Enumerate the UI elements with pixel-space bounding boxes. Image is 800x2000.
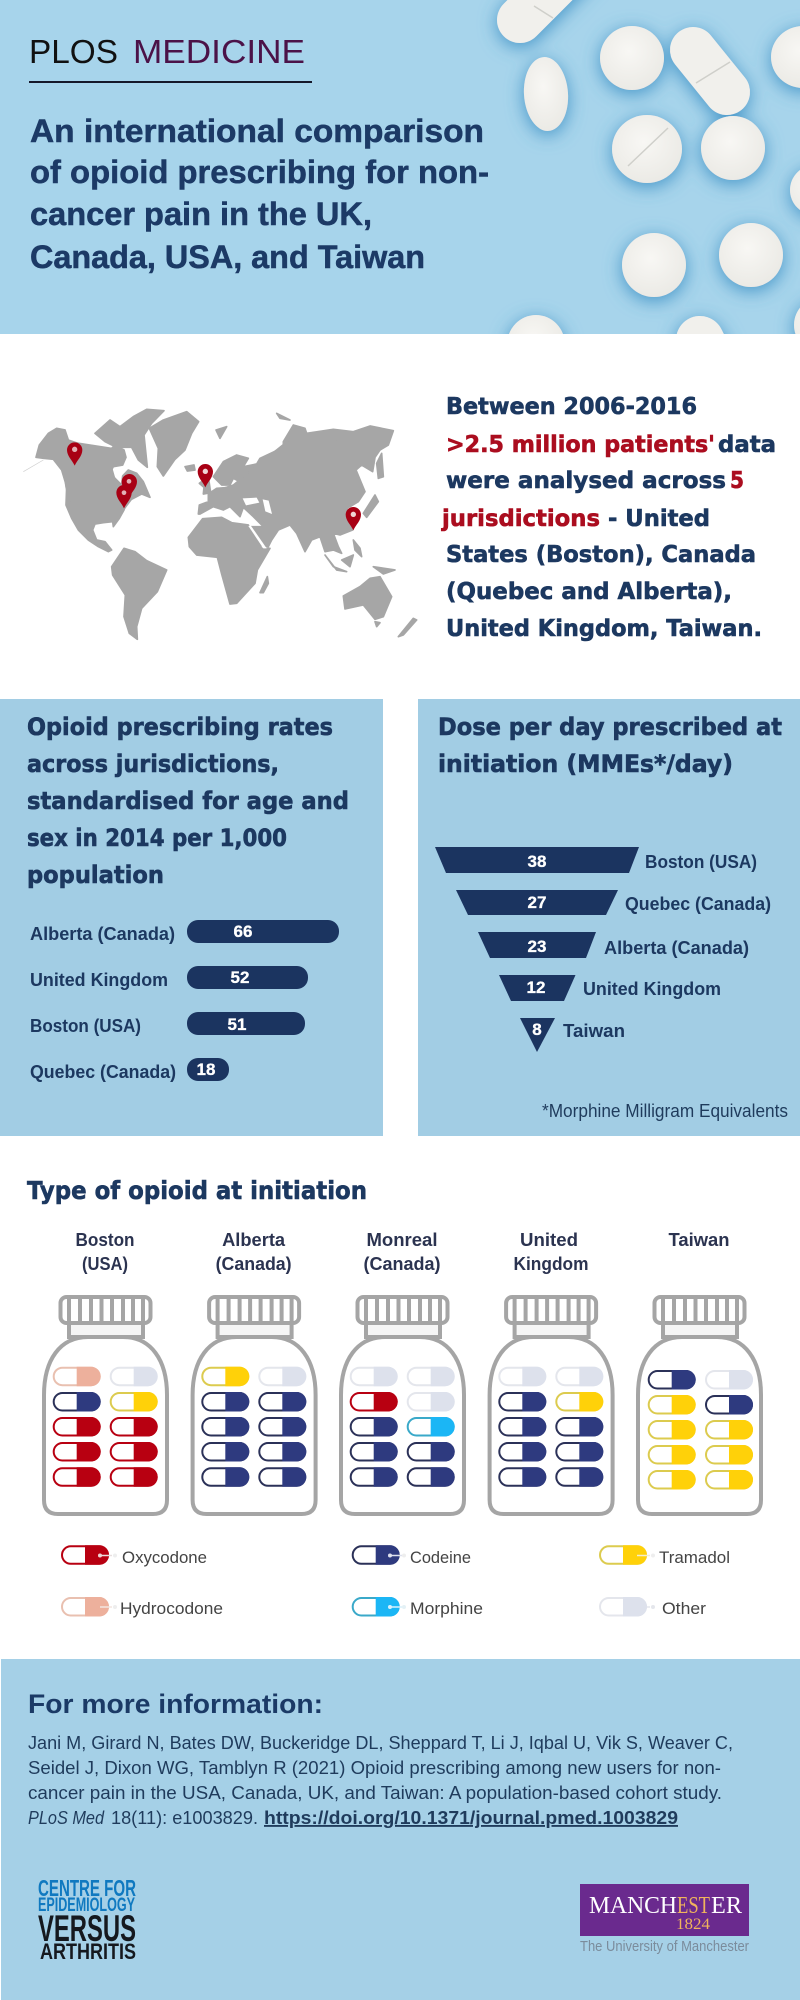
pin: Quebec (122, 474, 137, 497)
legend: other (600, 1597, 706, 1618)
funnel: Taiwan: Taiwan (563, 1021, 625, 1041)
citation: Seidel J, Dixon WG, Tamblyn R (2021) Opioid prescribing among new users for non- (28, 1757, 721, 1778)
map continents (36, 409, 417, 639)
panel: for more information (1, 1659, 800, 2000)
inland seas (243, 498, 272, 548)
footnote: *Morphine Milligram Equivalents (542, 1101, 788, 1121)
logo: Centre for Epidemiology Versus Arthritis: ARTHRITIS (40, 1939, 136, 1964)
funnel: Boston: 38 (528, 852, 546, 871)
study summary text: were analysed across (446, 468, 726, 494)
citation (28, 1732, 733, 1828)
bottle: United Kingdom: Kingdom (514, 1254, 589, 1274)
bottle: Alberta: Alberta (222, 1230, 286, 1250)
funnel: United Kingdom: 12 (527, 978, 545, 997)
heading: prescribing rates: across jurisdictions, (27, 750, 279, 778)
bar: Boston (30, 1012, 305, 1036)
study summary text: United Kingdom, Taiwan. (446, 616, 762, 642)
funnel: United Kingdom: United Kingdom (583, 979, 721, 999)
bottle: Alberta: (Canada) (216, 1254, 292, 1274)
citation: https://doi.org/10.1371/journal.pmed.1003829 (264, 1807, 678, 1828)
bar: Quebec: 18 (197, 1060, 215, 1079)
heading: prescribing rates: Opioid prescribing rates (27, 713, 333, 741)
legend: morphine: Morphine (410, 1599, 483, 1618)
study summary text: (Quebec and Alberta), (446, 579, 732, 605)
citation: PLoS Med (28, 1807, 105, 1828)
funnel: Quebec: 27 (528, 893, 546, 912)
funnel: Boston: Boston (USA) (645, 852, 757, 872)
logo: Centre for Epidemiology Versus Arthritis: VERSUS (38, 1908, 136, 1949)
bottle: Montreal (341, 1230, 464, 1514)
study summary text (441, 394, 776, 642)
legend (62, 1545, 730, 1618)
study summary text: jurisdictions (441, 506, 600, 532)
legend: codeine: Codeine (410, 1548, 471, 1567)
bottle: Boston: Boston (76, 1230, 134, 1250)
funnel: Alberta: Alberta (Canada) (604, 938, 749, 958)
heading: prescribing rates (27, 713, 349, 889)
title: cancer pain in the UK, (30, 196, 372, 232)
bar: United Kingdom (30, 966, 308, 990)
bottle: Montreal: Monreal (366, 1230, 438, 1250)
citation: Jani M, Girard N, Bates DW, Buckeridge DL, Sheppard T, Li J, Iqbal U, Vik S, Weaver C, (28, 1732, 733, 1753)
heading: prescribing rates: population (27, 861, 164, 889)
title: An international comparison (30, 113, 484, 149)
bottle: United Kingdom: United (520, 1230, 578, 1250)
pin: Boston (116, 485, 132, 508)
study summary text: 5 (730, 468, 744, 494)
panel: dose per day (418, 699, 800, 1136)
heading: dose per day (438, 713, 782, 778)
bottle: United Kingdom (490, 1230, 613, 1514)
citation: 18(11): e1003829. (111, 1807, 258, 1828)
legend: hydrocodone (62, 1597, 223, 1618)
bar: United Kingdom: 52 (231, 968, 249, 987)
heading: prescribing rates: standardised for age and (27, 787, 349, 815)
pin: Taiwan (346, 507, 361, 530)
title: of opioid prescribing for non- (30, 154, 489, 190)
bar: Alberta: Alberta (Canada) (30, 924, 175, 944)
logo: Centre for Epidemiology Versus Arthritis (38, 1875, 136, 1964)
legend: morphine (353, 1597, 483, 1618)
funnel: Alberta: 23 (528, 937, 546, 956)
legend: oxycodone: Oxycodone (122, 1548, 207, 1567)
panel: prescribing rates (0, 699, 383, 1136)
study summary text: States (Boston), Canada (446, 542, 756, 568)
logo: University of Manchester: MANCH (589, 1893, 677, 1919)
PLOS Medicine logo (29, 33, 312, 83)
funnel: United Kingdom (499, 975, 721, 1001)
bottle: Boston: (USA) (82, 1254, 128, 1274)
logo: University of Manchester (580, 1884, 749, 1955)
bottle: Boston (44, 1230, 167, 1514)
legend: codeine (353, 1545, 471, 1567)
bar: United Kingdom: United Kingdom (30, 970, 168, 990)
bar: Boston: 51 (228, 1015, 246, 1034)
citation: cancer pain in the USA, Canada, UK, and Taiwan: A population-based cohort study. (28, 1782, 722, 1803)
study summary text: >2.5 million patients' (446, 432, 715, 458)
bar: Boston: Boston (USA) (30, 1016, 141, 1036)
heading: prescribing rates: sex in 2014 per 1,000 (27, 824, 287, 852)
pin: Alberta (67, 442, 82, 466)
bottle: Alberta (193, 1230, 316, 1514)
title (30, 113, 489, 275)
photo of white pills (486, 0, 800, 334)
study summary text: data (718, 432, 776, 458)
heading: for more information: For more information: (28, 1689, 323, 1719)
funnel: Alberta (478, 932, 749, 958)
title: Canada, USA, and Taiwan (30, 239, 425, 275)
legend: tramadol: Tramadol (659, 1548, 730, 1567)
heading: dose per day: Dose per day prescribed at (438, 713, 782, 741)
legend: other: Other (662, 1599, 706, 1618)
pin: United Kingdom (198, 464, 213, 487)
bar: Quebec (30, 1058, 229, 1082)
study summary text: - United (608, 506, 710, 532)
bottle: Taiwan: Taiwan (668, 1230, 730, 1250)
legend: oxycodone (62, 1545, 207, 1567)
funnel: Taiwan: 8 (532, 1020, 542, 1039)
bottle: Taiwan (638, 1230, 761, 1514)
PLOS Medicine logo: PLOS (29, 33, 118, 70)
bar: Quebec: Quebec (Canada) (30, 1062, 176, 1082)
logo: Centre for Epidemiology Versus Arthritis: CENTRE FOR (38, 1875, 136, 1901)
heading: dose per day: initiation (MMEs*/day) (438, 750, 733, 778)
study summary text: Between 2006-2016 (446, 394, 697, 420)
logo: University of Manchester: EST (677, 1893, 710, 1919)
legend: tramadol (600, 1545, 730, 1567)
bar: Alberta: 66 (234, 922, 252, 941)
legend: hydrocodone: Hydrocodone (120, 1599, 223, 1618)
funnel: Quebec: Quebec (Canada) (625, 894, 771, 914)
logo: University of Manchester: 1824 (676, 1916, 710, 1933)
funnel: Boston (435, 847, 757, 873)
logo: University of Manchester: The University of Manchester (580, 1938, 749, 1955)
bottle: Montreal: (Canada) (364, 1254, 440, 1274)
heading: type of opioid: Type of opioid at initiation (27, 1176, 367, 1205)
logo: University of Manchester: ER (711, 1893, 742, 1919)
world map with location pins (23, 409, 417, 639)
header background (0, 0, 800, 334)
logo: Centre for Epidemiology Versus Arthritis: EPIDEMIOLOGY (38, 1895, 135, 1916)
Aleutian islands (23, 460, 43, 472)
funnel: Quebec (456, 890, 771, 915)
bar: Alberta (30, 920, 339, 944)
PLOS Medicine logo: MEDICINE (133, 33, 305, 70)
funnel: Taiwan (520, 1018, 625, 1052)
